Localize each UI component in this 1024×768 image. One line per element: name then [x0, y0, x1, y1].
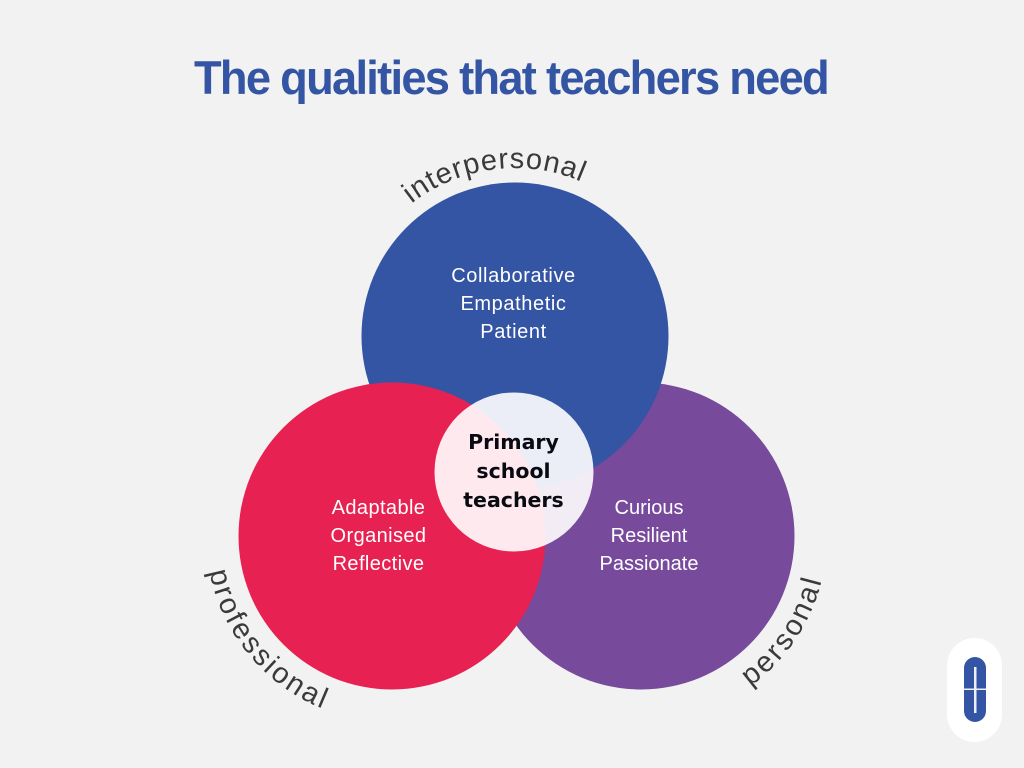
text block: professional qualities: Adaptable [332, 497, 425, 519]
title: The qualities that teachers need [194, 51, 828, 104]
text block: centre label: Primary [468, 430, 559, 454]
curved label: professional: professional [204, 570, 329, 708]
text block: personal qualities: Passionate [600, 553, 698, 575]
circle: personal [488, 382, 794, 690]
text block: professional qualities [331, 497, 426, 575]
text block: centre label [463, 430, 564, 512]
circle: interpersonal [362, 182, 668, 490]
icon: logo badge [947, 638, 1002, 742]
curved label: interpersonal: interpersonal [400, 152, 587, 202]
text block: centre label: teachers [463, 488, 564, 512]
text block: personal qualities: Resilient [611, 525, 688, 547]
text block: interpersonal qualities [451, 265, 576, 343]
text block: centre label: school [476, 459, 551, 483]
text block: interpersonal qualities: Patient [480, 321, 547, 343]
text block: interpersonal qualities: Empathetic [460, 293, 567, 315]
text block: professional qualities: Reflective [333, 553, 424, 575]
text block: personal qualities: Curious [615, 497, 683, 519]
text block: interpersonal qualities: Collaborative [451, 265, 576, 287]
circle: professional [238, 382, 546, 690]
curved label: personal: personal [742, 577, 821, 690]
circle: centre overlap [434, 392, 594, 552]
text block: professional qualities: Organised [331, 525, 426, 547]
text block: personal qualities [600, 497, 698, 575]
